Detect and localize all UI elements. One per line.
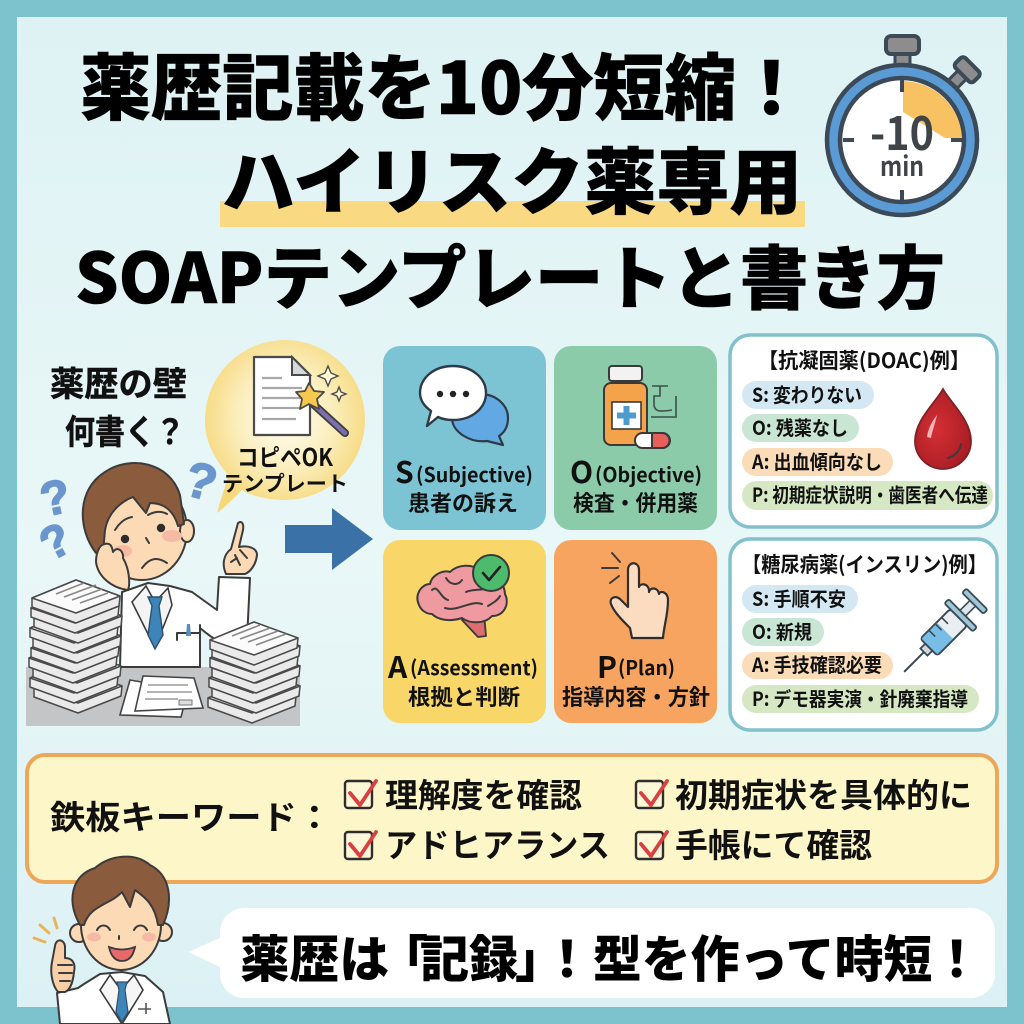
icon: medicine bottle bbox=[604, 366, 677, 448]
keyword: understanding: 理解度を確認 bbox=[385, 769, 582, 817]
panel: DOAC example: 【抗凝固薬(DOAC)例】 bbox=[758, 345, 970, 375]
paper stack right bbox=[208, 622, 300, 723]
speech bubble: closing message: 記録 bbox=[420, 920, 518, 992]
title: SOAPテンプレートと書き方 bbox=[75, 223, 945, 323]
panel: O objective: O bbox=[570, 448, 593, 492]
illustration: troubled pharmacist at desk bbox=[26, 463, 300, 726]
illustration: smiling pharmacist bbox=[34, 857, 172, 1024]
icon: question marks bbox=[31, 450, 223, 571]
panel: A assessment bbox=[383, 540, 546, 723]
doctor pointing hand bbox=[224, 522, 257, 574]
panel: S subjective: S bbox=[395, 448, 414, 492]
speech bubble: closing message: 薬歴は bbox=[240, 920, 389, 992]
panel: insulin example: A: 手技確認必要 bbox=[751, 649, 882, 678]
panel: insulin example bbox=[730, 539, 997, 730]
panel: P plan bbox=[554, 540, 717, 723]
papers on desk bbox=[120, 676, 203, 717]
callout: copy-paste template bbox=[205, 340, 365, 513]
icon: stopwatch: min bbox=[880, 145, 924, 184]
heading: wall of records: 薬歴の壁 bbox=[50, 357, 187, 406]
icon: stopwatch: -10 bbox=[870, 98, 934, 164]
panel: A assessment: (Assessment) bbox=[410, 652, 538, 681]
panel: A assessment: 根拠と判断 bbox=[408, 680, 520, 712]
panel: P plan: 指導内容・方針 bbox=[562, 680, 710, 712]
panel: P plan: (Plan) bbox=[618, 652, 675, 681]
doctor face bbox=[83, 463, 194, 580]
speech bubble: closing message: 「 bbox=[378, 920, 428, 992]
panel: DOAC example: A: 出血傾向なし bbox=[751, 446, 882, 475]
icon: question marks: ? bbox=[36, 470, 75, 527]
panel: key words: 鉄板キーワード： bbox=[50, 791, 332, 839]
icon: question marks: ? bbox=[31, 512, 80, 571]
title bbox=[75, 30, 945, 323]
panel: P plan: P bbox=[597, 643, 617, 687]
panel: key words bbox=[27, 755, 997, 882]
panel: O objective: (Objective) bbox=[595, 459, 702, 488]
panel: S subjective bbox=[383, 346, 546, 530]
heading: wall of records: 何書く？ bbox=[65, 405, 185, 454]
panel: O objective bbox=[554, 346, 717, 530]
panel: insulin example: S: 手順不安 bbox=[752, 583, 846, 612]
panel: S subjective: 患者の訴え bbox=[408, 486, 518, 518]
icon: speech bubbles bbox=[420, 366, 508, 445]
callout: copy-paste template: コピペOK bbox=[237, 438, 333, 473]
icon: blood drop bbox=[915, 389, 971, 469]
doctor left hand bbox=[96, 544, 129, 590]
panel: O objective: 検査・併用薬 bbox=[573, 486, 698, 518]
icon: tapping hand bbox=[602, 553, 668, 638]
icon: stopwatch bbox=[827, 36, 981, 215]
panel: S subjective: (Subjective) bbox=[416, 459, 533, 488]
panel: DOAC example: P: 初期症状説明・歯医者へ伝達 bbox=[752, 479, 988, 508]
speech bubble: closing message bbox=[188, 908, 995, 998]
title: ハイリスク薬専用 bbox=[222, 124, 802, 229]
callout: copy-paste template: テンプレート bbox=[222, 468, 348, 498]
icon: syringe bbox=[890, 585, 991, 686]
speech bubble: closing message: 」 bbox=[515, 920, 565, 992]
panel: DOAC example: S: 変わりない bbox=[752, 379, 862, 408]
keyword: adherence: アドヒアランス bbox=[385, 819, 610, 867]
doctor body bbox=[120, 577, 250, 667]
heading: wall of records bbox=[50, 357, 187, 454]
arrow bbox=[285, 508, 373, 570]
panel: DOAC example: O: 残薬なし bbox=[752, 412, 848, 441]
icon: brain with check bbox=[417, 555, 509, 637]
panel: DOAC example bbox=[730, 335, 997, 527]
speech bubble: closing message: ！ bbox=[542, 920, 592, 992]
paper stack left bbox=[29, 580, 122, 713]
panel: insulin example: O: 新規 bbox=[752, 616, 812, 645]
icon: question marks: ? bbox=[179, 450, 223, 512]
panel: insulin example: P: デモ器実演・針廃棄指導 bbox=[752, 683, 968, 712]
keyword: notebook: 手帳にて確認 bbox=[675, 819, 872, 867]
speech bubble: closing message: 型を作って時短！ bbox=[593, 920, 981, 992]
panel: insulin example: 【糖尿病薬(インスリン)例】 bbox=[742, 549, 987, 579]
icon: document with wand bbox=[254, 357, 346, 435]
keyword: early symptoms: 初期症状を具体的に bbox=[675, 769, 972, 817]
title: 薬歴記載を10分短縮！ bbox=[80, 30, 807, 135]
panel: A assessment: A bbox=[387, 643, 408, 687]
